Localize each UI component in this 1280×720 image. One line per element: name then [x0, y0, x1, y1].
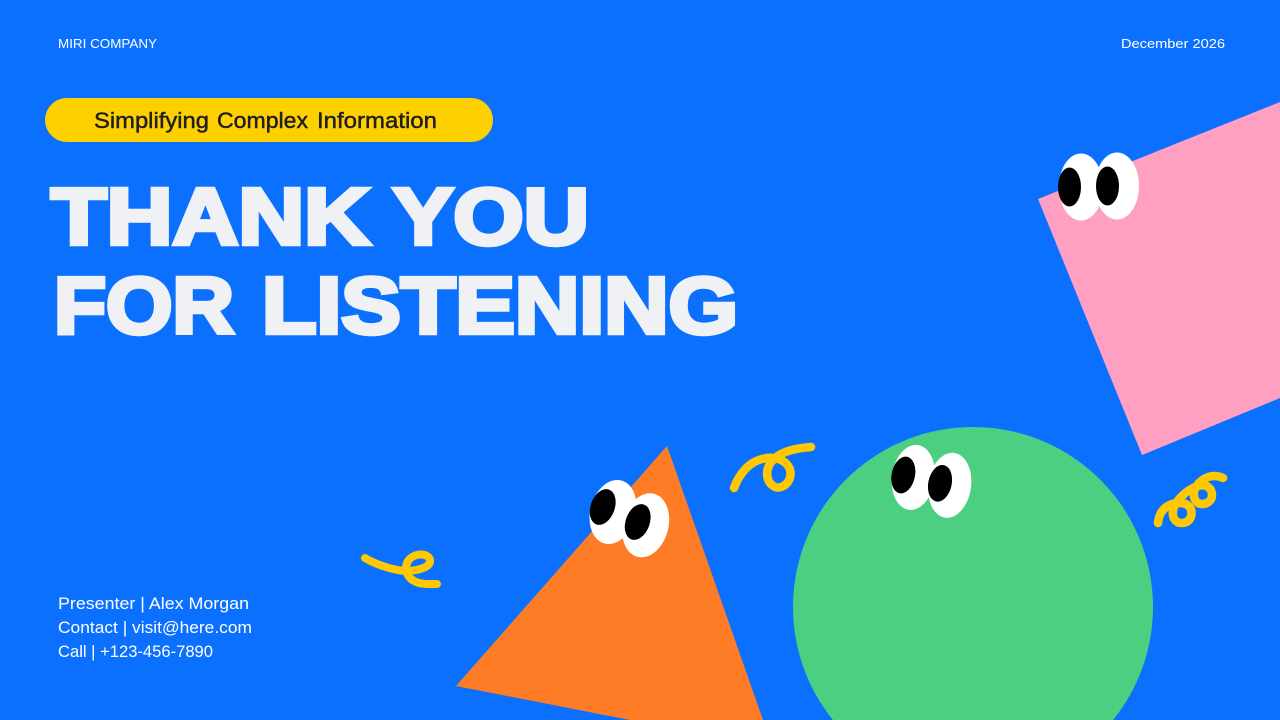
squiggle: right: [1158, 476, 1223, 523]
company name: MIRI COMPANY: [58, 36, 157, 51]
presenter contact details: Contact | visit@here.com: [58, 618, 252, 637]
presenter contact details: Call | +123-456-7890: [58, 642, 213, 661]
tagline pill: Complex: [217, 108, 308, 133]
title: LISTENING: [262, 261, 738, 350]
pink square character: [1038, 102, 1280, 455]
title: YOU: [393, 172, 589, 261]
tagline pill: Simplifying: [94, 108, 209, 133]
squiggle: top: [734, 447, 811, 488]
tagline pill: Information: [317, 108, 437, 133]
title: FOR: [54, 261, 234, 350]
orange triangle character: [456, 446, 763, 720]
tagline pill: [45, 98, 493, 142]
green circle character: [793, 427, 1153, 720]
presenter contact details: Presenter | Alex Morgan: [58, 594, 249, 613]
date: December 2026: [1121, 36, 1225, 51]
title: THANK: [51, 172, 370, 261]
squiggle: left: [365, 554, 437, 584]
title: [51, 172, 738, 350]
presenter contact details: [58, 594, 252, 661]
